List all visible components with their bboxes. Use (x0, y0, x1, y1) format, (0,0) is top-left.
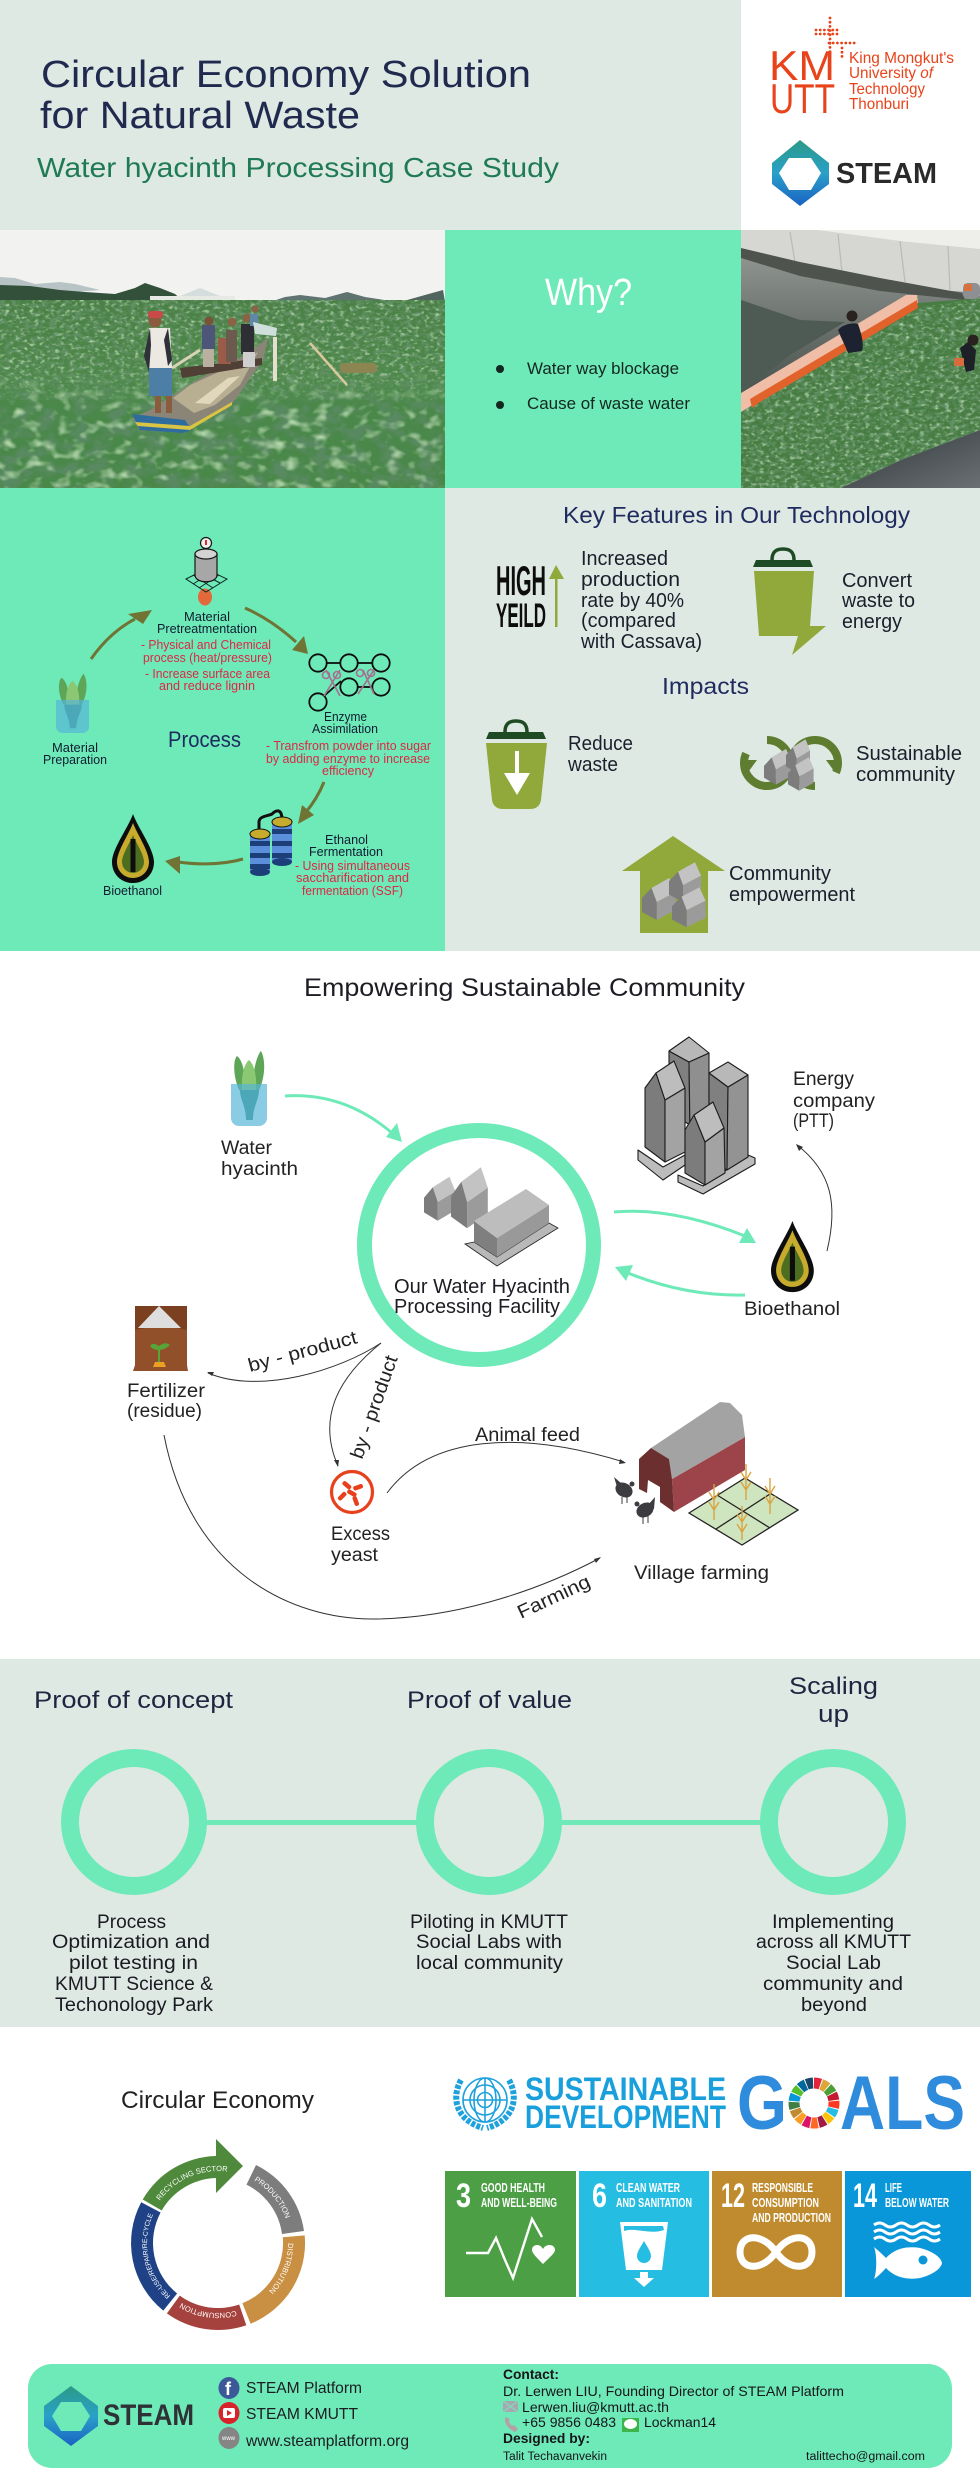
icon: SDG colour wheel (786, 2075, 842, 2131)
panel: process (0, 488, 445, 951)
tile: SDG 6: AND SANITATION (616, 2195, 692, 2210)
text: reduce waste (567, 733, 633, 776)
icon: website (218, 2427, 240, 2449)
text: increased production: rate by 40% (581, 590, 684, 612)
label: by-product to fertilizer: by - product (246, 1327, 360, 1377)
chart: circular economy ring: RECYCLING SECTOR (156, 2166, 228, 2200)
boat (132, 337, 277, 433)
text: stage 1: KMUTT Science & (55, 1974, 213, 1995)
label: water hyacinth (221, 1138, 298, 1180)
reason list: Cause of waste water (527, 395, 691, 413)
title: for Natural Waste (40, 95, 360, 137)
note: pretreatment: - Physical and Chemical (141, 637, 271, 652)
icon: bioethanol (771, 1221, 814, 1292)
label: enzyme assimilation: Enzyme (324, 709, 367, 724)
contact block: Lockman14 (644, 2414, 716, 2430)
text: sustainable community: Sustainable (856, 743, 962, 765)
icon: line (622, 2418, 639, 2432)
note: pretreatment: - Increase surface area (145, 666, 271, 681)
icon: youtube (218, 2402, 240, 2424)
logo: STEAM (772, 140, 937, 206)
text: stage 1: pilot testing in (69, 1953, 198, 1974)
label: material pretreatmentation: Pretreatmentation (157, 621, 257, 636)
label: village farming: Village farming (634, 1563, 769, 1584)
text: increased production (580, 548, 702, 653)
label: facility (394, 1276, 570, 1318)
contact block (503, 2366, 925, 2463)
text: stage 1 (52, 1912, 214, 2016)
arrow: bioethanol to facility (615, 1265, 745, 1295)
label: bioethanol: Bioethanol (103, 883, 162, 898)
text: increased production: production (581, 569, 680, 591)
arrow: facility to fertilizer (207, 1343, 381, 1381)
arrow: fermentation to bioethanol (165, 856, 243, 874)
icon: high yield (496, 557, 564, 635)
tile: SDG 6: CLEAN WATER (616, 2180, 680, 2195)
label: water hyacinth: Water (221, 1138, 273, 1159)
text: increased production: Increased (581, 548, 668, 570)
label: farming: Farming (514, 1572, 594, 1624)
heading: empowering: Empowering Sustainable Community (304, 974, 746, 1002)
note: fermentation: fermentation (SSF) (302, 883, 403, 898)
label: ethanol fermentation (309, 832, 383, 859)
text: increased production: (compared (581, 610, 676, 632)
contact block: Talit Techavanvekin (503, 2451, 607, 2463)
section: empowering sustainable community (127, 974, 876, 1624)
contact block: talittecho@gmail.com (806, 2451, 925, 2463)
text: stage 1: Process (97, 1912, 166, 1933)
tile: SDG 14: LIFE (885, 2180, 902, 2195)
label: energy company: company (793, 1091, 876, 1112)
icon: processing facility (424, 1167, 558, 1266)
tile: SDG 12: 12 (721, 2177, 745, 2215)
icon: energy company towers (638, 1037, 755, 1194)
label: energy company: Energy (793, 1069, 855, 1090)
contact block: Lerwen.liu@kmutt.ac.th (522, 2399, 669, 2415)
logo: KMUTT (769, 18, 954, 122)
man standing (144, 311, 172, 413)
logo: sustainable development goals: G (737, 2061, 787, 2146)
tile: SDG 12: CONSUMPTION (752, 2195, 819, 2210)
icon: mail (503, 2401, 518, 2412)
panel: why (445, 230, 741, 488)
icon: pretreatment reactor (186, 538, 227, 606)
label: facility: Our Water Hyacinth (394, 1276, 570, 1298)
panel: roadmap (0, 1659, 980, 2027)
icon: chickens (613, 1477, 656, 1524)
panel: header (0, 0, 741, 230)
heading: proof of concept: Proof of concept (34, 1687, 233, 1714)
label: material preparation: Preparation (43, 752, 107, 767)
label: material pretreatmentation (157, 609, 257, 636)
logo: STEAM: STEAM (836, 158, 937, 190)
text: convert waste (841, 570, 915, 633)
arrow: hyacinth to facility (285, 1096, 402, 1142)
logo: KMUTT: University of (849, 65, 935, 82)
label: energy company (793, 1069, 876, 1132)
text: sustainable community (856, 743, 962, 786)
heading: process: Process (168, 727, 241, 752)
heading: impacts: Impacts (662, 673, 749, 699)
arrow: pretreatment to enzyme (245, 608, 308, 654)
text: convert waste: Convert (842, 570, 912, 592)
workers (838, 283, 980, 372)
text: stage 2: Social Labs with (416, 1932, 562, 1953)
icon: sustainable community (742, 739, 841, 791)
note: fermentation: saccharification and (296, 870, 409, 885)
text: stage 1: Techonology Park (55, 1995, 214, 2016)
contact block: +65 9856 0483 (522, 2414, 616, 2430)
icon: phone (505, 2417, 518, 2432)
label: facility: Processing Facility (394, 1296, 560, 1318)
icon: high yield: YEILD (496, 597, 546, 635)
note: enzyme: by adding enzyme to increase (266, 751, 430, 766)
text: reduce waste: Reduce (568, 733, 633, 755)
label: material preparation (43, 740, 107, 767)
text: stage 3: beyond (801, 1995, 867, 2016)
icon: high yield: HIGH (496, 557, 546, 604)
text: stage 2: Piloting in KMUTT (410, 1912, 568, 1933)
heading: scaling up: up (818, 1701, 849, 1728)
text: stage 2: local community (416, 1953, 564, 1974)
note: fermentation: - Using simultaneous (295, 858, 410, 873)
heading: key features: Key Features in Our Technology (563, 502, 911, 528)
icon: facebook (218, 2377, 240, 2399)
photo: boat on water hyacinth field (0, 230, 445, 488)
stage 1 circle (70, 1758, 198, 1886)
stage 3 circle (769, 1758, 897, 1886)
label: excess yeast: Excess (331, 1524, 390, 1545)
tile: SDG 12: RESPONSIBLE (752, 2180, 813, 2195)
icon: enzyme chains (309, 654, 390, 711)
label: bioethanol: Bioethanol (744, 1299, 840, 1320)
icon: fermentation tanks (250, 811, 292, 876)
label: ethanol fermentation: Ethanol (325, 832, 368, 847)
text: convert waste: energy (842, 611, 902, 633)
arrow: yeast to farm (387, 1442, 626, 1493)
tile: SDG 6: 6 (592, 2177, 607, 2215)
icon: reduce waste bin (486, 721, 547, 809)
logo: STEAM footer (44, 2386, 194, 2446)
tile: SDG 6 (579, 2171, 709, 2297)
logo: sustainable development goals: SUSTAINABLE (525, 2071, 726, 2107)
stage 2 circle (425, 1758, 553, 1886)
icon: UN emblem (456, 2078, 514, 2128)
arrow: preparation to pretreatment (91, 610, 152, 659)
panel: footer (28, 2364, 952, 2468)
tile: SDG 3: 3 (456, 2177, 471, 2215)
chart: circular economy ring: PRODUCTION (254, 2176, 290, 2218)
icon: excess yeast (332, 1472, 372, 1512)
contact block: Contact: (503, 2366, 559, 2382)
heading: proof of value: Proof of value (407, 1687, 572, 1714)
tile: SDG 12 (712, 2171, 842, 2297)
label: fertilizer (127, 1381, 206, 1422)
label: energy company: (PTT) (793, 1111, 834, 1132)
connector line (134, 1820, 833, 1825)
text: stage 3: community and (763, 1974, 903, 1995)
arrow: facility to bioethanol (614, 1211, 756, 1243)
text: stage 3: across all KMUTT (756, 1932, 911, 1953)
reason list (496, 360, 691, 413)
tile: SDG 14: 14 (853, 2177, 877, 2215)
heading: scaling up (789, 1673, 878, 1728)
logo: sustainable development goals (456, 2061, 965, 2146)
note: pretreatment: process (heat/pressure) (143, 650, 272, 665)
label: material preparation: Material (52, 740, 98, 755)
icon: waste to energy bin (753, 549, 826, 655)
label: by-product to yeast: by - product (347, 1352, 403, 1462)
photo: workers clearing hyacinth in canal (741, 230, 980, 488)
tile: SDG 12: AND PRODUCTION (752, 2210, 831, 2225)
note: enzyme: - Transfrom powder into sugar (266, 738, 432, 753)
text: sustainable community: community (856, 764, 955, 786)
icon: water hyacinth (231, 1051, 267, 1126)
icon: bioethanol drop (112, 814, 154, 883)
heading: circular economy: Circular Economy (121, 2087, 314, 2114)
icon: fertilizer bag (133, 1306, 188, 1371)
logo: KMUTT: UTT (770, 75, 835, 122)
text: stage 3 (756, 1912, 911, 2016)
logo: KMUTT: KM (769, 42, 835, 89)
chart: circular economy ring: DISTRIBUTION (269, 2244, 294, 2294)
arrow: enzyme to fermentation (298, 782, 324, 824)
logo: KMUTT: Technology (849, 81, 925, 98)
note: pretreatment (141, 637, 272, 693)
icon: community empowerment (622, 836, 725, 933)
note: fermentation (295, 858, 410, 898)
text: increased production: with Cassava) (580, 631, 702, 653)
label: excess yeast (331, 1524, 390, 1566)
tile: SDG 3: AND WELL-BEING (481, 2195, 557, 2210)
logo: sustainable development goals: DEVELOPMENT (525, 2099, 726, 2135)
title (40, 54, 531, 137)
facility ring (364, 1130, 594, 1360)
icon: material hyacinth (56, 674, 89, 733)
chart: circular economy ring (131, 2139, 306, 2330)
label: fertilizer: Fertilizer (127, 1381, 206, 1402)
icon: facebook: f (225, 2379, 232, 2399)
label: material pretreatmentation: Material (184, 609, 230, 624)
reason list: Water way blockage (527, 360, 679, 378)
arrow: bioethanol to energy company (796, 1144, 832, 1251)
text: facebook: STEAM Platform (246, 2380, 362, 2397)
text: stage 3: Implementing (772, 1912, 894, 1933)
heading: scaling up: Scaling (789, 1673, 878, 1700)
contact block: Designed by: (503, 2430, 590, 2446)
icon: village farm (613, 1402, 798, 1545)
arrow: fertilizer to farming (164, 1435, 601, 1619)
label: animal feed: Animal feed (475, 1425, 580, 1446)
tile: SDG 14 (845, 2171, 971, 2297)
text: website: www.steamplatform.org (245, 2433, 409, 2450)
note: pretreatment: and reduce lignin (159, 678, 255, 693)
contact block: Dr. Lerwen LIU, Founding Director of STEAM Platform (503, 2383, 844, 2399)
text: youtube: STEAM KMUTT (246, 2406, 358, 2423)
text: stage 3: Social Lab (786, 1953, 881, 1974)
tile: SDG 3: GOOD HEALTH (481, 2180, 545, 2195)
panel: why: Why? (545, 272, 632, 314)
crew on boat (202, 306, 277, 367)
text: reduce waste: waste (567, 754, 618, 776)
subtitle: Water hyacinth Processing Case Study (37, 152, 559, 183)
label: enzyme assimilation (312, 709, 378, 736)
label: water hyacinth: hyacinth (221, 1159, 298, 1180)
panel: key features and impacts (445, 488, 980, 951)
label: excess yeast: yeast (331, 1545, 379, 1566)
text: community empowerment: empowerment (729, 884, 855, 906)
label: enzyme assimilation: Assimilation (312, 721, 378, 736)
text: stage 2 (410, 1912, 568, 1974)
logo: KMUTT: King Mongkut's (849, 50, 954, 67)
chart: circular economy ring: RE-USE/REPAIR/RE-CYCLE (142, 2213, 170, 2299)
text: community empowerment: Community (729, 863, 831, 885)
icon: website: www (221, 2436, 236, 2442)
text: community empowerment (729, 863, 855, 906)
chart: circular economy ring: CONSUMPTION (180, 2303, 236, 2318)
title: Circular Economy Solution (41, 54, 531, 96)
logo: STEAM footer: STEAM (103, 2399, 194, 2432)
arrow: facility to yeast (330, 1343, 381, 1467)
text: stage 1: Optimization and (52, 1932, 210, 1953)
tile: SDG 3 (445, 2171, 576, 2297)
text: convert waste: waste to (841, 590, 915, 612)
label: ethanol fermentation: Fermentation (309, 844, 383, 859)
note: enzyme (266, 738, 432, 778)
note: enzyme: efficiency (322, 763, 374, 778)
logo: KMUTT: Thonburi (849, 96, 909, 113)
label: fertilizer: (residue) (127, 1401, 202, 1422)
